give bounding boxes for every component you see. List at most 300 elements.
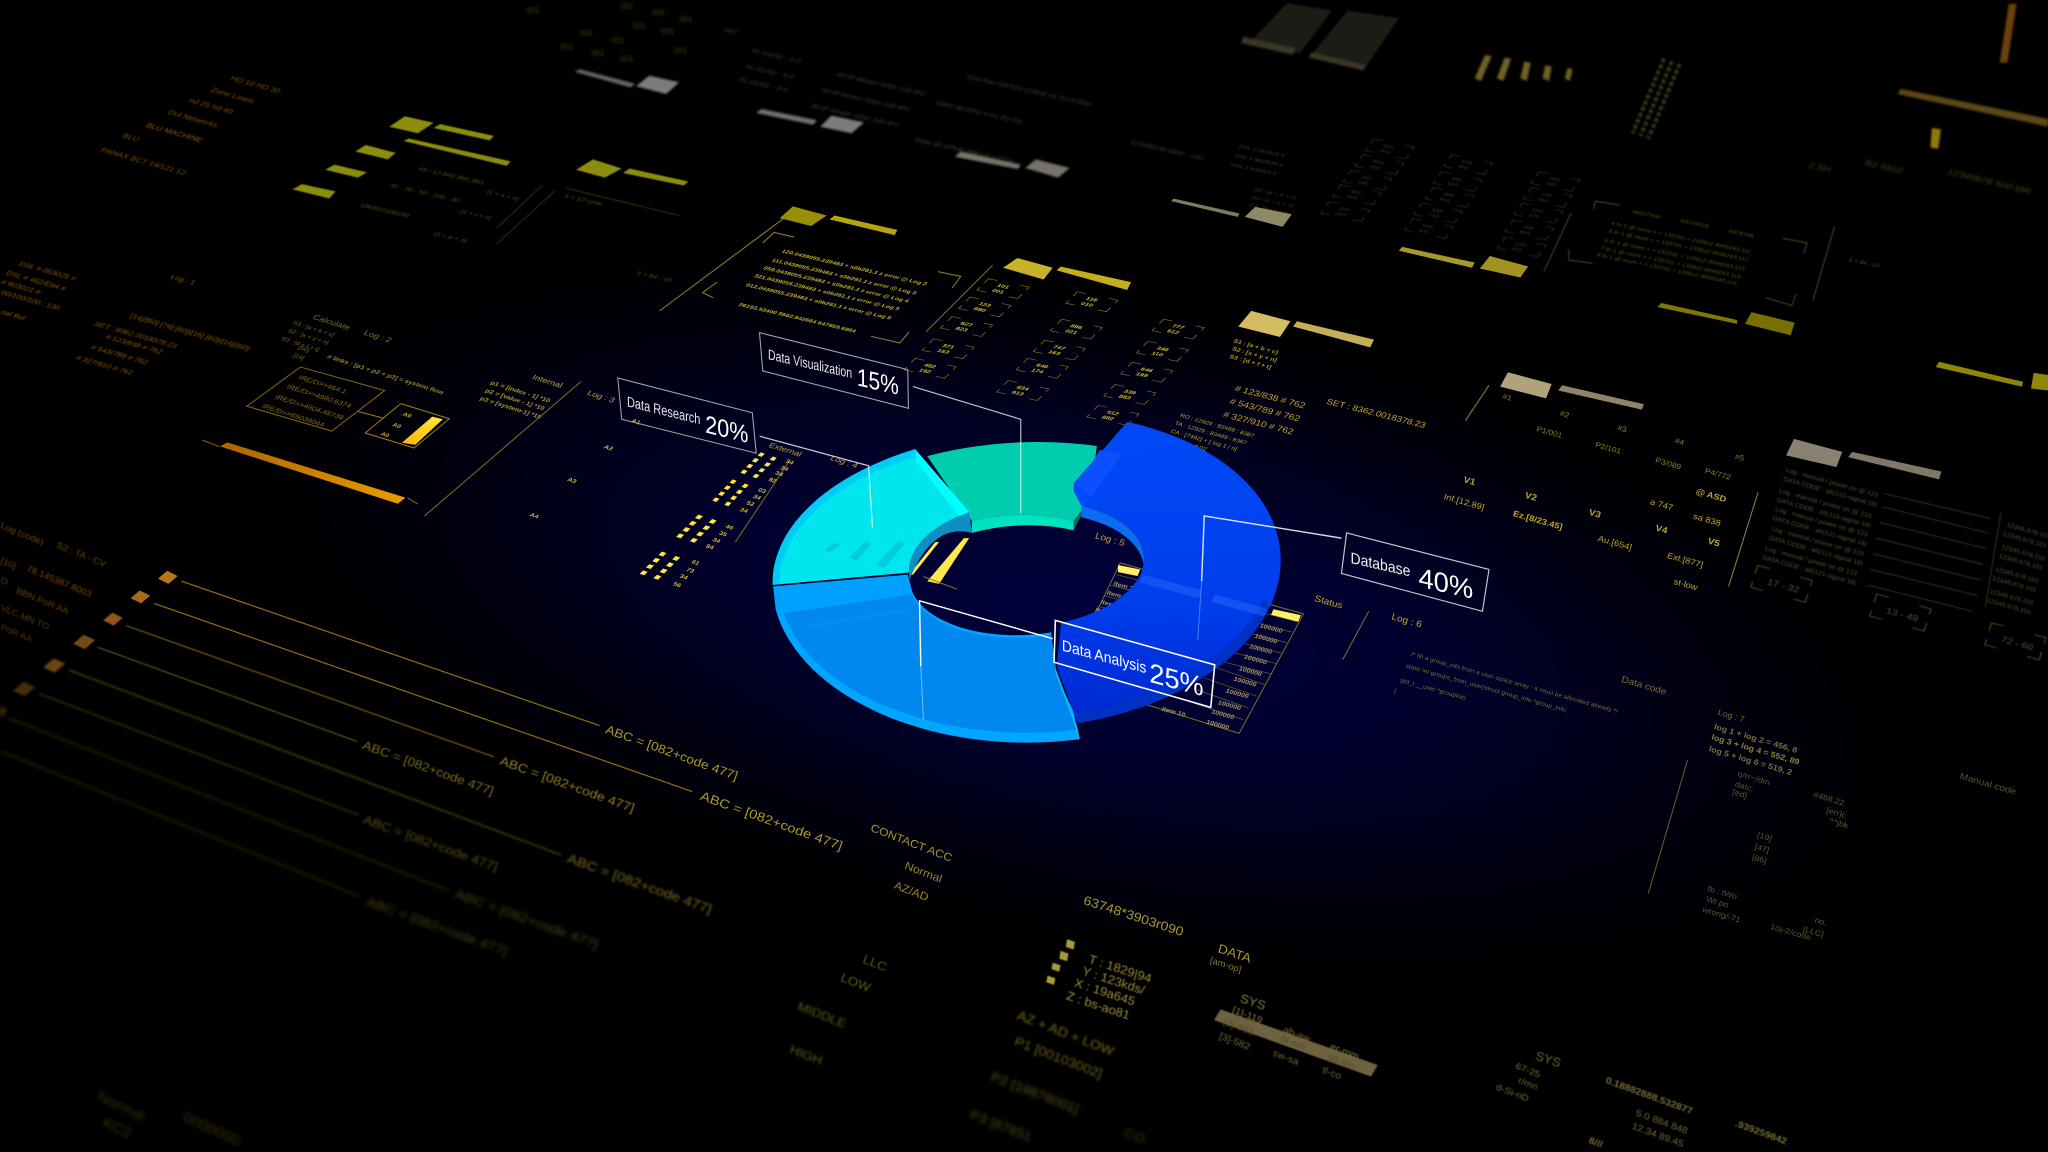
- long number rows: 0.18882888.532877: [1604, 1076, 1694, 1117]
- panel: left code labels: [0, 521, 108, 645]
- dot cluster numbers: 61: [690, 559, 701, 567]
- olive tile 3: [2031, 373, 2048, 391]
- long number rows: 12.34 89.45: [1631, 1121, 1685, 1150]
- panel: right parameter table: Ext.[877]: [1666, 551, 1704, 570]
- far number specks: 001: [674, 47, 687, 56]
- panel: coordinates readout: [968, 893, 1253, 1147]
- s-lines: S2 : [x + y + n]: [1231, 346, 1278, 364]
- panel: far right manual log rows: Log : manual / power on @ 123: [1785, 467, 1879, 499]
- connector and gauge box: [358, 404, 449, 448]
- panel: top left orange text: BLU: [120, 132, 142, 143]
- small yellow tile: [1930, 128, 1941, 149]
- panel: top left orange text: BLU MACHINE: [144, 122, 205, 144]
- v row: [1462, 475, 1721, 548]
- sys values: r/mn: [1517, 1076, 1539, 1093]
- grey tile: [1245, 207, 1292, 227]
- manual code: Manual code: [1958, 771, 2017, 797]
- far number specks: 001: [652, 9, 665, 18]
- panel: far dim bracket grid: 901: [1345, 195, 1359, 201]
- panel: far right manual log rows: 72 - 60: [2000, 635, 2034, 653]
- table rows: Item 4: [1094, 607, 1116, 618]
- panel: top left orange text: nd 25 hd 40: [187, 97, 236, 116]
- dot cluster numbers: 52: [745, 500, 756, 508]
- log lines: [737, 249, 929, 334]
- dot cluster numbers: 34: [779, 465, 790, 473]
- id heading: 63748*3903r090: [1082, 893, 1185, 939]
- panel: far dim bracket grid: 114: [1337, 207, 1350, 213]
- panel: left upper dim labels: # 327/910 # 762: [74, 354, 135, 376]
- panel: far right manual log rows: Log : manual / power on @ 123: [1764, 545, 1858, 577]
- data code: Data code: [1620, 675, 1668, 697]
- row 1: [158, 571, 740, 783]
- panel: risk level labels: MIDDLE: [796, 999, 849, 1031]
- calculate labels: Log : 2: [362, 328, 394, 344]
- panel: top left orange text: PANAX BCT 19/121 12: [99, 146, 189, 177]
- table frame: [1064, 563, 1304, 733]
- callout: database 40%: Database: [1351, 550, 1411, 581]
- five small bars: [1475, 55, 1573, 81]
- panel: right tile row: [1003, 199, 2048, 479]
- olive header tile: [780, 206, 827, 226]
- grid column 3: 199: [1134, 372, 1150, 379]
- panel: far right manual log rows: 12345.678.101: [1991, 575, 2038, 594]
- panel: log 7 readout: q/rr~/dm: [1737, 769, 1771, 787]
- long number rows: 5.0 884 848: [1634, 1108, 1689, 1137]
- grey bar right: [1848, 452, 1941, 479]
- sys rows: [1]-119: [1231, 1005, 1264, 1027]
- panel: right parameter table: st-low: [1673, 577, 1699, 592]
- grid column 1: [904, 279, 1029, 378]
- panel: far dim bracket grid: 621: [1382, 144, 1395, 150]
- log 6: Log : 6: [1390, 612, 1423, 630]
- log rows: 7 fn 1 @ more + + 1337d1 + 1336c2 8699243.114: [1599, 246, 1742, 280]
- hash headers: P4/772: [1704, 467, 1732, 482]
- dot cluster numbers: A3: [566, 477, 578, 485]
- leader line: data research: [760, 436, 872, 528]
- dot cluster numbers: 82: [767, 477, 778, 485]
- grid column 3: 348: [1154, 346, 1171, 353]
- grid column 1: 880: [972, 307, 988, 313]
- panel: log 7 readout: datc;: [1734, 779, 1755, 793]
- row 6: ABC = [082+code 477]: [361, 812, 500, 874]
- calculate labels: Internal: [531, 373, 565, 389]
- grid column 3: 339: [1122, 389, 1138, 396]
- gold bar: [1057, 266, 1131, 290]
- callout: data analysis 25%: [1054, 620, 1215, 707]
- grid column 2: 116: [1084, 296, 1100, 303]
- dot cluster numbers: 73: [685, 567, 696, 575]
- system flow caption: # links : [p1 + p2 + p3] = system flow: [325, 354, 446, 396]
- grid column 1: 192: [917, 368, 933, 375]
- grid column 1: 823: [953, 326, 970, 333]
- panel: bottom left blurred labels: KC2: [101, 1115, 133, 1142]
- small rows: [1167, 414, 1256, 453]
- grid column 1: 163: [935, 348, 951, 355]
- row 2: [131, 590, 845, 853]
- panel: risk level labels: LOW: [839, 970, 873, 995]
- box values: IRE/D>>4880.6374: [285, 383, 353, 410]
- table rows: Item 3: [1099, 599, 1122, 610]
- log lines: 111.0439055.239483 + s0b281.1 z error @ Log 3: [770, 258, 918, 296]
- coordinates: [1065, 952, 1153, 1022]
- small rows: CA : [7492] + [ log 1 / n]: [1169, 429, 1238, 452]
- row 5: [43, 658, 714, 917]
- panel: log 7 readout: [86]: [1751, 852, 1768, 865]
- panel: far right manual log rows: Log : manual / power on @ 123: [1771, 526, 1865, 558]
- panel: bottom left blurred labels: 0000000: [182, 1110, 242, 1150]
- panel: far right manual log rows: [1751, 467, 2048, 660]
- olive tiles: [389, 116, 434, 133]
- panel: far dim bracket grid: 151: [1510, 247, 1523, 253]
- table rows: [1094, 581, 1284, 731]
- panel: far right manual log rows: Log : manual / power on @ 123: [1774, 506, 1869, 538]
- parameter formulas: p3 = [system-1] *10: [478, 396, 543, 420]
- hash headers: P1/001: [1535, 425, 1563, 440]
- far number specks: [526, 2, 692, 63]
- grid column 3: 882: [1100, 415, 1116, 422]
- far number specks: 001: [679, 15, 692, 24]
- panel: olive block group upper left: [293, 116, 688, 199]
- hash rows: [1222, 384, 1307, 436]
- calculate labels: Calculate: [311, 313, 353, 332]
- dot cluster 2: [712, 479, 749, 506]
- dot cluster 3: [676, 515, 717, 543]
- panel: bracket number grid: [904, 279, 1204, 425]
- panel: bottom left blurred labels: Normal: [95, 1089, 146, 1125]
- grid column 2: 646: [1034, 363, 1050, 370]
- panel: far dim bracket grid: 712: [1426, 213, 1440, 219]
- olive bar 2: [1657, 303, 1737, 324]
- table rows: 100000: [1224, 688, 1250, 700]
- panel: left upper dim labels: # 903021 #: [0, 278, 44, 296]
- dot cluster numbers: 34: [678, 574, 690, 581]
- log 5 label: Log : 5: [1094, 530, 1126, 548]
- panel: risk level labels: HIGH: [788, 1042, 824, 1068]
- coordinates: Y : 123kds/: [1081, 964, 1147, 997]
- parameter formulas: p1 = [index - 1] *10: [489, 380, 552, 404]
- row 3: ABC = [082+code 477]: [498, 753, 637, 815]
- sys rows: [1218, 1005, 1360, 1082]
- far text rows: 001: [722, 28, 739, 36]
- far number specks: 001: [560, 43, 573, 52]
- gauge labels: [379, 412, 413, 439]
- far text rows: 00 tP Mnasr 0291 100 tPJ: [835, 72, 926, 97]
- leader line: data analysis: [920, 601, 1053, 666]
- segment: data analysis 25%: [773, 575, 1079, 743]
- panel: far right manual log rows: 12345.678.101: [1998, 553, 2044, 572]
- table rows: 100000: [1210, 709, 1236, 721]
- row 4: ABC = [082+code 477]: [361, 738, 496, 798]
- v row: V1: [1462, 475, 1477, 487]
- panel: far dim bracket grid: 511: [1417, 229, 1430, 235]
- outline box with values: [247, 367, 385, 431]
- small rows: RO : 12929 : 83489 : 8387: [1179, 414, 1256, 439]
- olive tile 1: [1480, 256, 1528, 278]
- callout: data research 20%: [618, 378, 756, 453]
- grid column 3: 646: [1139, 367, 1155, 374]
- set value: SET : 8362.0018378.23: [1325, 397, 1427, 430]
- panel: far dim bracket grid: 190: [1544, 182, 1557, 188]
- far right text: 12345678 500 MR: [1945, 168, 2033, 197]
- table rows: Item 10: [1160, 706, 1187, 719]
- grid column 1: 482: [922, 363, 938, 370]
- dot cluster numbers: 34: [711, 537, 722, 545]
- panel: far right manual log rows: DATA CODE : a6(121-signal 18): [1768, 535, 1864, 567]
- table rows: Item 1: [1112, 581, 1135, 592]
- status: Status: [1313, 594, 1344, 611]
- panel: log 7 readout: log 3 + log 4 = 552, 89: [1710, 732, 1801, 767]
- s-lines: S3 : [d + f + t]: [1228, 354, 1272, 371]
- far right text: 2.5H: [1806, 161, 1833, 175]
- dot cluster numbers: 84: [704, 544, 716, 551]
- coordinates: Z : bs-ao81: [1065, 989, 1131, 1022]
- far text rows: ORG 90 FPS 4 P1 P2 P3: [934, 101, 1023, 125]
- sys heading: SYS: [1534, 1049, 1562, 1070]
- panel: left upper dim labels: [0, 260, 252, 376]
- s-formula list: [280, 321, 335, 361]
- leader tail: data analysis: [921, 666, 923, 720]
- az/ad: AZ/AD: [892, 879, 930, 904]
- panel: central hash readouts: [1167, 338, 1427, 453]
- data heading: DATA: [1217, 941, 1253, 966]
- text: olive block notes: [1 + r + n]: [459, 209, 493, 221]
- dim dotted column: [1633, 59, 1680, 138]
- panel: far top data blocks: [526, 2, 2048, 197]
- text: olive block notes: 32 - 20 - 50 - 100 - 30: [388, 183, 461, 204]
- panel: left code labels: VLC MN TO: [0, 603, 51, 632]
- far text rows: 00 tP Mnasr 0291 100 tPJ: [809, 104, 900, 128]
- panel: far dim bracket grid: 445: [1356, 180, 1369, 186]
- normal: Normal: [903, 860, 944, 885]
- orange progress bar: [202, 440, 418, 504]
- hash headers: #3: [1616, 423, 1628, 434]
- panel: left upper dim labels: DSL # 053025 #: [17, 260, 79, 283]
- panel: log 7 readout: [err]c: [1825, 805, 1847, 820]
- callout: data analysis 25%: 25%: [1149, 657, 1204, 702]
- panel: far dim bracket grid: 123: [1460, 160, 1473, 166]
- grid column 2: 913: [1010, 390, 1026, 397]
- parameter formulas: p2 = [value - 1] *10: [483, 388, 546, 412]
- panel: log 7 readout: 1/a-2/code: [1769, 921, 1812, 942]
- segment: data research 20%: [773, 449, 972, 585]
- far right text: B2 5502: [1863, 158, 1905, 176]
- dot cluster numbers: A4: [528, 512, 540, 520]
- top grey tiles: [575, 69, 1070, 178]
- sys heading: SYS: [1239, 992, 1267, 1013]
- panel: far right manual log rows: 12345.678.101: [1986, 598, 2032, 616]
- panel: log 7 readout: #468.22: [1812, 790, 1846, 808]
- far text rows: FL-01/02 - 4-0: [737, 78, 789, 93]
- grid column 2: 163: [1046, 350, 1062, 356]
- hash headers: #4: [1674, 436, 1686, 447]
- dot cluster numbers: 56: [672, 581, 683, 589]
- grid column 3: [1087, 319, 1204, 425]
- row 7: ABC = [082+code 477]: [453, 887, 600, 951]
- panel: far dim bracket grid: 201: [1334, 212, 1347, 218]
- coordinates: X : 19a645: [1073, 976, 1136, 1008]
- s-formula list: S3 : [d + f + t]: [280, 337, 320, 353]
- panel: log 7 readout: [ed]: [1731, 787, 1748, 800]
- panel: far right manual log rows: 13 - 49: [1885, 606, 1919, 624]
- row 2: ABC = [082+code 477]: [699, 789, 845, 853]
- calculate labels: Log : 4: [828, 454, 860, 470]
- panel: far dim bracket grid: 330: [1430, 208, 1443, 214]
- far text rows: 00 tP Mnasr 0291 100 tPJ: [819, 88, 911, 113]
- calculate labels: [311, 313, 860, 470]
- log rows: 53216028: [1679, 219, 1710, 230]
- small rows: TA : 12929 : 83489 : 8387: [1173, 421, 1248, 446]
- log rows: 4 fn 1 @ more + + 1337d1 + 1336c2 8699243.111: [1610, 222, 1752, 255]
- table rows: 100000: [1205, 719, 1231, 731]
- panel: left upper dim labels: # 543/789 # 762: [89, 344, 150, 366]
- callout: data analysis 25%: Data Analysis: [1062, 637, 1146, 677]
- callout: database 40%: [1341, 533, 1489, 611]
- gauge labels: A0: [401, 412, 413, 420]
- hash rows: # 123/838 # 762: [1234, 384, 1307, 410]
- panel: far dim bracket grid: 804: [1442, 192, 1455, 198]
- data subheading: [am-op]: [1209, 955, 1243, 975]
- log lines: 059.0439055.239483 + s0b281.1 z error @ Log 4: [762, 266, 910, 304]
- panel: far right manual log rows: DATA CODE : a6(121-signal 18): [1776, 497, 1871, 529]
- panel: upper right log block: [1544, 201, 1881, 306]
- gauge labels: A0: [379, 432, 391, 439]
- grid column 2: 174: [1029, 368, 1045, 375]
- row 3: [103, 613, 637, 815]
- olive tile 2: [1745, 312, 1795, 335]
- row rules: [1087, 575, 1297, 720]
- grid column 3: 110: [1149, 351, 1165, 358]
- panel: log 7 readout: ^^jbk: [1828, 816, 1850, 830]
- row 7: [0, 705, 600, 951]
- panel: right parameter table: Ez.[8/23.45]: [1512, 509, 1564, 532]
- callout: data visualization 15%: Data Visualization: [768, 347, 852, 382]
- segment: database 40%: [1055, 422, 1281, 739]
- v row: V5: [1707, 536, 1721, 548]
- box values: [260, 374, 353, 428]
- yellow bar 1: [909, 542, 939, 575]
- panel: far dim bracket grid: 611: [1438, 197, 1451, 203]
- sys rows: ab-aw: [1282, 1025, 1312, 1045]
- code snippet: static int groups_from_user(struct group_info *group_info,: [1405, 663, 1568, 714]
- panel: left code labels: 78.145387.8003: [25, 564, 93, 599]
- s-formula list: S2 : [x + y + n]: [286, 329, 330, 346]
- panel: bottom right numeric readout: [1495, 1049, 1788, 1151]
- log lines: 26193.53400 5662.842664 647859.6964: [737, 303, 858, 334]
- panel: left upper dim labels: # 123/838 # 762: [103, 333, 165, 356]
- p1: P1 [00103002]: [1013, 1034, 1104, 1081]
- far number specks: 001: [580, 28, 593, 37]
- top right orange bar: [1898, 89, 2048, 127]
- far number specks: 001: [661, 27, 674, 36]
- panel: bars in donut hole: [909, 530, 1126, 589]
- grid column 3: 612: [1165, 329, 1181, 336]
- panel: far dim bracket grid: 551: [1349, 190, 1362, 196]
- long number rows: .939259842: [1734, 1119, 1788, 1148]
- panel: left upper dim labels: SET : 8362.0018378.23: [92, 320, 179, 350]
- grid column 3: 777: [1170, 324, 1186, 331]
- divider line: [1465, 385, 1758, 586]
- row 1: ABC = [082+code 477]: [604, 722, 740, 783]
- dot cluster 4: [640, 552, 680, 580]
- dot cluster numbers: [528, 418, 795, 589]
- table rows: 100000: [1253, 633, 1279, 645]
- hash rows: # 327/910 # 762: [1222, 410, 1295, 436]
- sys values: [1495, 1061, 1541, 1104]
- panel: left upper dim labels: 00/100/100 : 130: [0, 289, 62, 312]
- callout: data visualization 15%: 15%: [857, 364, 899, 401]
- dot cluster numbers: 34: [751, 494, 763, 502]
- grid column 1: 123: [977, 302, 993, 308]
- panel: log 7 readout: log 5 + log 6 = 519, 2: [1708, 744, 1794, 777]
- panel: right parameter table: @ ASD: [1695, 487, 1728, 504]
- tan tile: [1500, 372, 1552, 398]
- gauge bar: [402, 417, 443, 445]
- far right text: [1806, 158, 2033, 197]
- highlight band: [1214, 1009, 1378, 1077]
- parameter formulas: [478, 380, 552, 420]
- s-formula list: S1 : [a + b + c]: [291, 321, 335, 338]
- yellow bar 2: [927, 538, 969, 584]
- log lines: 012.0439055.239483 + s0b281.1 z error @ Log 6: [744, 283, 893, 321]
- sys rows: [2]-881: [1222, 1017, 1256, 1039]
- panel: far dim bracket grid: 312: [1359, 175, 1373, 181]
- row 5: ABC = [082+code 477]: [565, 851, 714, 917]
- panel: far dim bracket grid: 551: [1536, 197, 1549, 203]
- log rows: 34627408: [1630, 210, 1662, 220]
- table rows: 100000: [1243, 654, 1268, 666]
- coordinates: T : 1829|94: [1087, 952, 1153, 986]
- box values: IRE/D>>464.1: [297, 374, 349, 395]
- pale gold bar: [1293, 321, 1374, 347]
- calculate labels: Log : 3: [585, 388, 618, 404]
- s-lines: [1228, 338, 1279, 371]
- donut chart: [760, 387, 1341, 743]
- corner brackets: [660, 216, 961, 343]
- panel: far dim bracket grid: 280: [1521, 225, 1535, 231]
- panel: log 7 readout: no.: [1814, 915, 1828, 927]
- gauge labels: A0: [391, 423, 403, 430]
- panel: right parameter table: sa 838: [1692, 511, 1722, 528]
- panel: far dim bracket grid: [1229, 139, 1580, 257]
- dot cluster numbers: A2: [602, 444, 615, 452]
- callout: data research 20%: 20%: [705, 411, 748, 449]
- s-formula list: [50]: [297, 346, 311, 354]
- leader line: database: [1202, 516, 1341, 581]
- v row: V3: [1588, 507, 1602, 520]
- p2: P2 [19876001]: [989, 1069, 1081, 1116]
- panel: far dim bracket grid: 121: [1527, 213, 1540, 219]
- hash headers: #2: [1559, 409, 1570, 420]
- text: olive block notes: [1 + p + n]: [433, 232, 468, 244]
- panel: far dim bracket grid: 104: [1531, 208, 1544, 214]
- panel: top left orange text: HD 10 HD 30: [229, 75, 283, 95]
- panel: left code labels: PoR AA: [0, 622, 34, 645]
- table rows: 100000: [1232, 676, 1258, 688]
- grid column 2: 896: [1068, 324, 1084, 331]
- panel: log 7 readout: wrong/-71: [1700, 904, 1742, 925]
- far number specks: 001: [620, 2, 633, 11]
- divider lines: [424, 265, 1369, 660]
- panel: far right manual log rows: DATA CODE : a6(121-signal 18): [1761, 555, 1857, 587]
- far number specks: 001: [526, 6, 539, 15]
- text: olive block notes: 5 + 84 - 10: [635, 271, 673, 283]
- dot cluster numbers: 34: [773, 470, 785, 478]
- box values: IRE/D>>65039044: [260, 402, 327, 428]
- log 7 lines: Log : 7: [1717, 707, 1746, 724]
- grid column 2: [997, 292, 1118, 400]
- grid column 1: 001: [990, 288, 1006, 295]
- segment: data visualization 15%: [927, 442, 1097, 533]
